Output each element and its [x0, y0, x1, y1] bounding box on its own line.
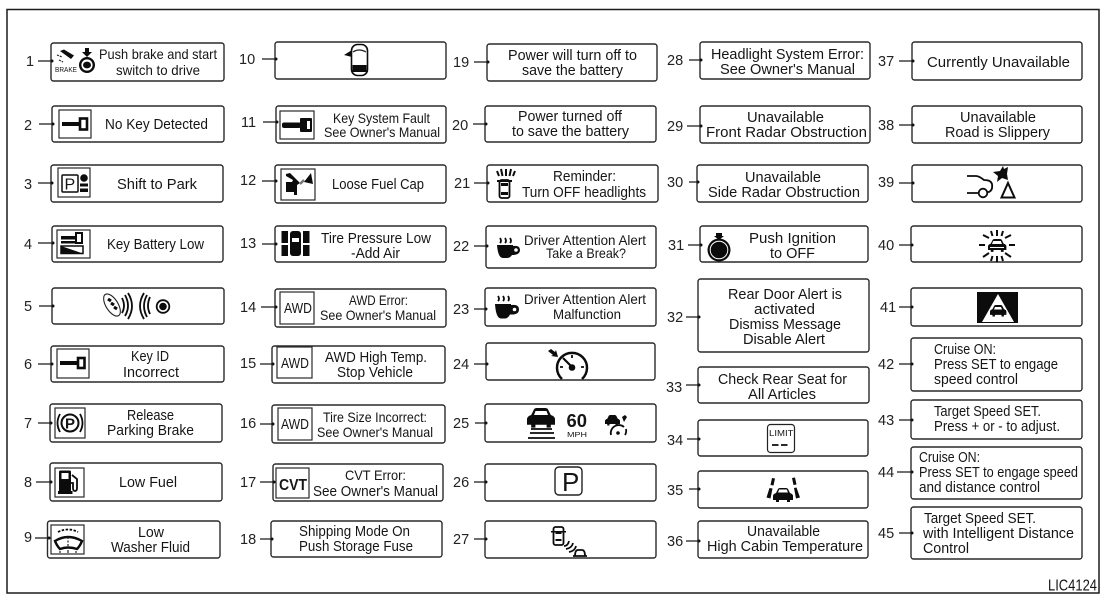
- icon: tire pressure: [282, 231, 310, 256]
- message 2: no key detected: [24, 106, 224, 142]
- message 30: side radar obstruction: 30: [667, 175, 683, 191]
- message 26: park: [453, 464, 656, 501]
- message 41: vehicle warning triangle: [880, 288, 1082, 326]
- message 11: key system fault: Key System Fault: [333, 110, 430, 126]
- message 33: check rear seat: All Articles: [748, 386, 816, 403]
- icon: car and sensor waves: [551, 527, 587, 556]
- message 19: power will turn off: save the battery: [522, 62, 623, 79]
- message 19: power will turn off: [453, 44, 657, 81]
- message 8: low fuel: Low Fuel: [119, 474, 177, 491]
- message 4: key battery low: Key Battery Low: [107, 236, 204, 253]
- message 2: no key detected: 2: [24, 118, 32, 134]
- message 18: shipping mode on: 18: [240, 532, 256, 548]
- icon: parking brake: P: [65, 416, 75, 432]
- icon: brake pedal and start switch: BRAKE: [55, 67, 77, 74]
- message 33: check rear seat: 33: [666, 380, 682, 396]
- message 13: tire pressure low: [240, 226, 446, 262]
- message 34: speed limit: [667, 420, 868, 456]
- message 15: awd high temp: Stop Vehicle: [337, 364, 413, 381]
- message 20: power turned off: [452, 106, 656, 142]
- message 9: low washer fluid: Low: [138, 524, 164, 541]
- message 9: low washer fluid: [24, 521, 220, 558]
- message 7: release parking brake: Parking Brake: [107, 422, 194, 439]
- message 22: driver attention alert: 22: [453, 239, 469, 255]
- message 40: headlight glare: [878, 226, 1082, 262]
- message 6: key id incorrect: 6: [24, 357, 32, 373]
- message 13: tire pressure low: 13: [240, 236, 256, 252]
- message 43: target speed set: 43: [878, 413, 894, 429]
- icon: limit sign: [768, 424, 794, 452]
- message 15: awd high temp: 15: [240, 356, 256, 372]
- message 36: high cabin temperature: Unavailable: [747, 523, 820, 540]
- message 32: rear door alert: activated: [754, 301, 815, 318]
- message 32: rear door alert: Dismiss Message: [729, 316, 841, 333]
- message 6: key id incorrect: Incorrect: [123, 364, 180, 381]
- icon: AWD: AWD: [281, 416, 309, 433]
- message 21: turn off headlights: 21: [454, 176, 470, 192]
- message 29: front radar obstruction: [667, 106, 870, 143]
- message 3: shift to park: 3: [24, 177, 32, 193]
- message 38: road is slippery: 38: [878, 118, 894, 134]
- message 17: cvt error: [240, 464, 443, 501]
- speed readout: 60: [566, 411, 587, 431]
- message 28: headlight system error: 28: [667, 53, 683, 69]
- message 23: driver attention malfunction: [453, 288, 656, 326]
- message 16: tire size incorrect: 16: [240, 416, 256, 432]
- icon: speed limiter status: [605, 415, 627, 435]
- message 44: cruise on with distance: 44: [878, 465, 894, 481]
- icon: speedometer: [548, 349, 587, 379]
- message 15: awd high temp: AWD High Temp.: [325, 349, 427, 366]
- message 45: target speed with distance control: with Intelligent Distance: [922, 525, 1074, 542]
- message 44: cruise on with distance: Cruise ON:: [919, 449, 980, 466]
- message 17: cvt error: 17: [240, 475, 256, 491]
- icon: key and low battery: [57, 230, 90, 258]
- icon: vehicle ahead: [527, 408, 555, 438]
- icon: key: [59, 110, 91, 138]
- message 6: key id incorrect: [24, 346, 224, 382]
- message 18: shipping mode on: Push Storage Fuse: [299, 538, 413, 555]
- message 1: push brake and start: [26, 43, 224, 81]
- message 40: headlight glare: 40: [878, 238, 894, 254]
- message 12: loose fuel cap: [240, 165, 446, 203]
- message 17: cvt error: CVT Error:: [345, 467, 406, 483]
- message 27: rear cross traffic: [453, 521, 656, 558]
- message 25: cruise set display: [453, 404, 656, 442]
- icon: CVT: CVT: [279, 477, 307, 494]
- message 21: turn off headlights: [454, 165, 658, 202]
- icon: car with flash rays: [979, 230, 1015, 262]
- message 24: speedometer alert: [453, 343, 655, 380]
- message 42: cruise on: [878, 338, 1082, 391]
- icon: headlight reminder: [497, 169, 515, 198]
- message 37: currently unavailable: 37: [878, 54, 894, 70]
- message 4: key battery low: 4: [24, 237, 32, 253]
- message 30: side radar obstruction: [667, 165, 868, 202]
- icon: coffee cup: [497, 238, 520, 258]
- message 22: driver attention alert: Take a Break?: [546, 245, 626, 261]
- message 38: road is slippery: Unavailable: [960, 109, 1036, 126]
- icon: parking brake: [55, 408, 85, 438]
- message 28: headlight system error: Headlight System Error:: [711, 46, 864, 63]
- message 32: rear door alert: Rear Door Alert is: [728, 286, 842, 303]
- message 31: push ignition to off: Push Ignition: [749, 230, 836, 247]
- message 29: front radar obstruction: 29: [667, 119, 683, 135]
- message 45: target speed with distance control: [878, 507, 1082, 559]
- icon: fuel pump: [55, 468, 84, 497]
- message 35: lane assist: [667, 471, 868, 508]
- icon: AWD: [277, 347, 312, 378]
- message 2: no key detected: No Key Detected: [105, 116, 208, 133]
- message 32: rear door alert: 32: [667, 310, 683, 326]
- icon: brake pedal and start switch: [55, 48, 94, 74]
- message 44: cruise on with distance: and distance control: [919, 479, 1040, 496]
- icon: AWD: [278, 408, 312, 440]
- icon: limit sign: LIMIT: [769, 428, 794, 438]
- message 31: push ignition to off: [668, 226, 868, 262]
- icon: park and shift: [58, 168, 90, 197]
- message 33: check rear seat: Check Rear Seat for: [718, 371, 847, 388]
- message 13: tire pressure low: -Add Air: [351, 245, 400, 262]
- icon: CVT: [276, 468, 309, 498]
- speed readout: [566, 411, 587, 439]
- message 45: target speed with distance control: Target Speed SET.: [924, 510, 1036, 527]
- icon: coffee cup: [495, 296, 519, 318]
- message 11: key system fault: [241, 106, 446, 143]
- message 32: rear door alert: [667, 279, 869, 352]
- message 13: tire pressure low: Tire Pressure Low: [321, 230, 431, 247]
- message 28: headlight system error: See Owner's Manual: [720, 61, 855, 78]
- message 43: target speed set: Target Speed SET.: [934, 403, 1041, 420]
- message 31: push ignition to off: to OFF: [770, 245, 815, 262]
- message 23: driver attention malfunction: 23: [453, 302, 469, 318]
- message 5: key fob signal: [24, 288, 224, 324]
- message 19: power will turn off: Power will turn off to: [508, 47, 637, 64]
- message 4: key battery low: [24, 226, 223, 262]
- message 20: power turned off: Power turned off: [518, 108, 623, 125]
- message 12: loose fuel cap: Loose Fuel Cap: [332, 176, 424, 193]
- message 1: push brake and start: switch to drive: [116, 62, 200, 78]
- icon: washer fluid: [51, 525, 84, 554]
- message 43: target speed set: Press + or - to adjust.: [934, 418, 1060, 435]
- message 44: cruise on with distance: Press SET to engage speed: [919, 464, 1078, 481]
- message 28: headlight system error: [667, 42, 870, 79]
- message 43: target speed set: [878, 400, 1082, 439]
- message 6: key id incorrect: Key ID: [131, 348, 169, 365]
- message 21: turn off headlights: Reminder:: [553, 168, 616, 185]
- message 14: awd error: [240, 289, 446, 327]
- message 14: awd error: AWD Error:: [349, 292, 408, 308]
- message 42: cruise on: Press SET to engage: [934, 356, 1058, 373]
- message 9: low washer fluid: 9: [24, 530, 32, 546]
- message 30: side radar obstruction: Unavailable: [745, 169, 821, 186]
- message 20: power turned off: 20: [452, 118, 468, 134]
- message 14: awd error: 14: [240, 300, 256, 316]
- message 19: power will turn off: 19: [453, 55, 469, 71]
- message 42: cruise on: 42: [878, 357, 894, 373]
- icon: fuel cap: [281, 169, 315, 200]
- message 31: push ignition to off: 31: [668, 238, 684, 254]
- speed readout: MPH: [567, 432, 587, 439]
- message 26: park: 26: [453, 475, 469, 491]
- message 10: door open: [239, 42, 446, 79]
- icon: key: [57, 349, 89, 378]
- message 29: front radar obstruction: Unavailable: [747, 109, 824, 126]
- icon: warning triangle with car: [977, 292, 1018, 323]
- message 44: cruise on with distance: [878, 447, 1082, 499]
- message 7: release parking brake: 7: [24, 416, 32, 432]
- icon: ignition switch: [708, 233, 730, 262]
- icon: P indicator: [555, 467, 582, 497]
- message 20: power turned off: to save the battery: [512, 123, 629, 140]
- message 3: shift to park: Shift to Park: [117, 176, 197, 193]
- icon: AWD: AWD: [281, 355, 309, 372]
- message 22: driver attention alert: Driver Attention Alert: [524, 232, 646, 248]
- message 34: speed limit: 34: [667, 433, 683, 449]
- message 7: release parking brake: [24, 404, 222, 442]
- message 3: shift to park: [24, 165, 223, 202]
- message 21: turn off headlights: Turn OFF headlights: [522, 184, 646, 201]
- message 42: cruise on: speed control: [934, 371, 1018, 388]
- message 11: key system fault: See Owner's Manual: [324, 124, 440, 140]
- icon: AWD: [280, 292, 314, 324]
- message 8: low fuel: [24, 463, 222, 501]
- message 39: forward collision warning: [878, 165, 1082, 202]
- message 41: vehicle warning triangle: 41: [880, 300, 896, 316]
- message 42: cruise on: Cruise ON:: [934, 341, 996, 358]
- message 5: key fob signal: 5: [24, 299, 32, 315]
- icon: park and shift: P: [64, 176, 75, 194]
- message 36: high cabin temperature: High Cabin Temperature: [707, 538, 863, 555]
- message 35: lane assist: 35: [667, 483, 683, 499]
- message 30: side radar obstruction: Side Radar Obstruction: [708, 184, 860, 201]
- message 37: currently unavailable: [878, 42, 1082, 80]
- icon: P indicator: P: [562, 467, 579, 497]
- message 1: push brake and start: Push brake and start: [99, 46, 217, 62]
- message 45: target speed with distance control: Control: [923, 540, 969, 557]
- message 23: driver attention malfunction: Driver Attention Alert: [524, 291, 646, 307]
- message 24: speedometer alert: 24: [453, 357, 469, 373]
- message 18: shipping mode on: Shipping Mode On: [299, 523, 410, 540]
- message 16: tire size incorrect: [240, 405, 445, 443]
- message 37: currently unavailable: Currently Unavailable: [927, 54, 1070, 71]
- message 18: shipping mode on: [240, 521, 442, 557]
- message 11: key system fault: 11: [241, 115, 256, 131]
- message 16: tire size incorrect: Tire Size Incorrect:: [323, 409, 427, 425]
- message 29: front radar obstruction: Front Radar Obstruction: [706, 124, 867, 141]
- icon: car between lane lines: [766, 478, 800, 502]
- message 14: awd error: See Owner's Manual: [320, 307, 436, 323]
- icon: collision star and warning triangle: [967, 166, 1014, 198]
- figure code: LIC4124: [1048, 578, 1097, 594]
- message 17: cvt error: See Owner's Manual: [313, 483, 438, 500]
- message 39: forward collision warning: 39: [878, 175, 894, 191]
- message 32: rear door alert: Disable Alert: [743, 331, 826, 348]
- message 36: high cabin temperature: 36: [667, 534, 683, 550]
- message 8: low fuel: 8: [24, 475, 32, 491]
- message 10: door open: 10: [239, 52, 255, 68]
- message 33: check rear seat: [666, 367, 869, 403]
- message 16: tire size incorrect: See Owner's Manual: [317, 424, 433, 440]
- message 15: awd high temp: [240, 346, 445, 383]
- message 23: driver attention malfunction: Malfunction: [553, 306, 621, 322]
- message 9: low washer fluid: Washer Fluid: [111, 539, 190, 556]
- message 22: driver attention alert: [453, 226, 656, 268]
- icon: AWD: AWD: [284, 300, 312, 317]
- message 38: road is slippery: [878, 106, 1082, 143]
- message 7: release parking brake: Release: [127, 407, 174, 424]
- message 1: push brake and start: 1: [26, 54, 34, 70]
- message 38: road is slippery: Road is Slippery: [945, 124, 1050, 141]
- message 27: rear cross traffic: 27: [453, 532, 469, 548]
- message 25: cruise set display: 25: [453, 416, 469, 432]
- icon: key: [280, 111, 314, 139]
- icon: car door open: [344, 44, 368, 76]
- message 12: loose fuel cap: 12: [240, 173, 256, 189]
- message 36: high cabin temperature: [667, 521, 868, 558]
- icon: fob and receiver waves: [100, 291, 169, 319]
- message 45: target speed with distance control: 45: [878, 526, 894, 542]
